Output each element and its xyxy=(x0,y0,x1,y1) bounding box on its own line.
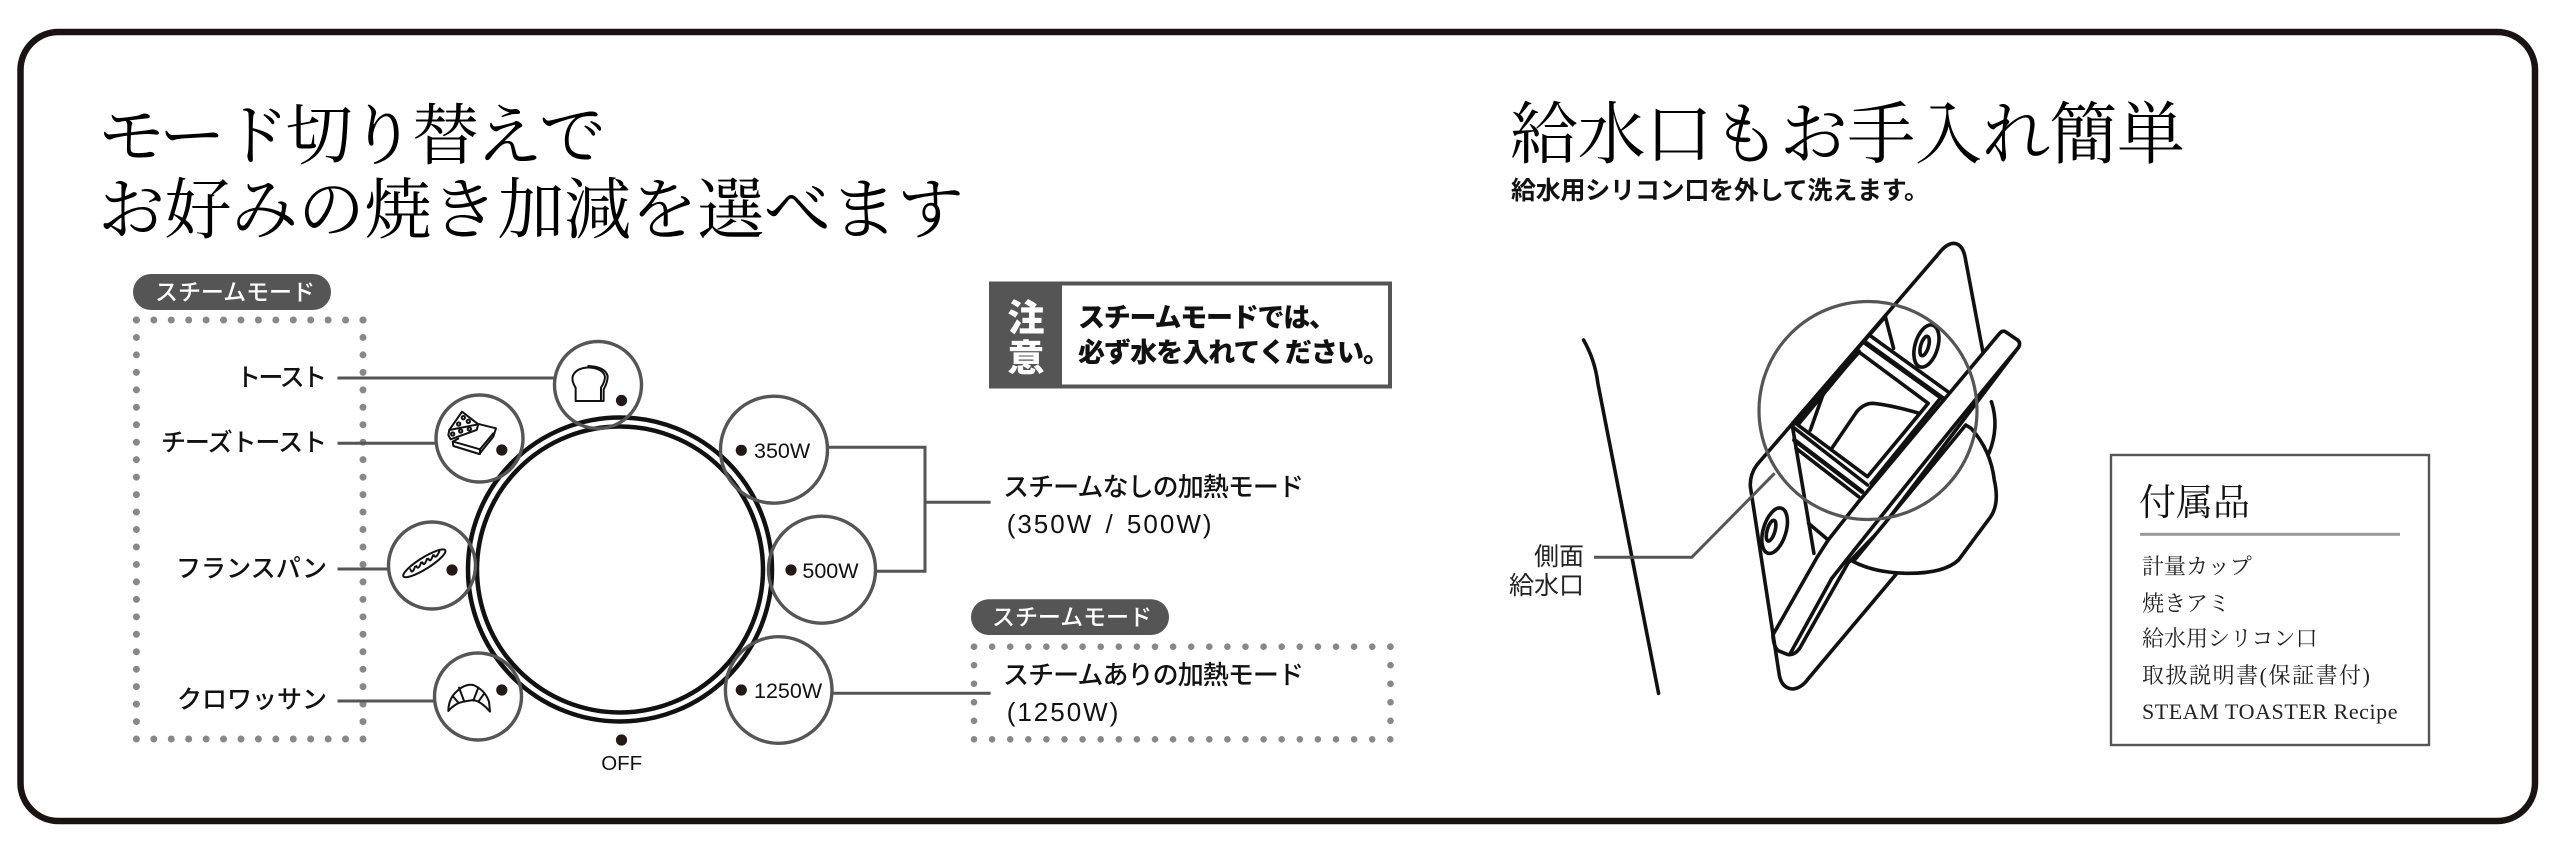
toaster side curve xyxy=(1584,340,1659,693)
water inlet drawing xyxy=(1750,243,2020,689)
caution box xyxy=(989,282,1390,388)
label: no-steam heating mode xyxy=(1003,467,1304,539)
label: no-steam heating mode: スチームなしの加熱モード xyxy=(1003,467,1304,504)
label: steam heating mode: (1250W) xyxy=(1007,697,1120,727)
leader line: 1250W xyxy=(832,692,991,695)
mode circle: 500W xyxy=(768,516,876,623)
mode circle: 1250W: 1250W xyxy=(754,679,823,703)
off position: OFF xyxy=(601,752,642,775)
food mode labels: チーズトースト xyxy=(161,423,327,459)
food mode labels xyxy=(161,358,327,716)
left title: モード切り替えで xyxy=(98,100,606,174)
label: side water inlet: 側面 xyxy=(1534,537,1584,573)
leader line: side inlet xyxy=(1594,473,1775,557)
label: steam heating mode: スチームありの加熱モード xyxy=(1003,655,1304,692)
left title xyxy=(98,100,964,248)
bracket: no-steam modes xyxy=(828,447,991,571)
mode circle: croissant xyxy=(434,653,522,740)
magnifier circle xyxy=(1759,302,1977,520)
label: no-steam heating mode: (350W / 500W) xyxy=(1007,509,1214,539)
caution box: 必ず水を入れてください。 xyxy=(1078,331,1390,370)
right subtitle: 給水用シリコン口を外して洗えます。 xyxy=(1511,171,1929,207)
accessories list: 取扱説明書(保証書付) xyxy=(2142,663,2370,688)
off position xyxy=(601,734,642,775)
mode circle: 350W: 350W xyxy=(754,439,811,463)
mode circle: cheese toast xyxy=(436,395,523,482)
food mode labels: フランスパン xyxy=(176,549,327,585)
steam mode pill: left: スチームモード xyxy=(155,273,315,307)
left title: お好みの焼き加減を選べます xyxy=(98,174,964,248)
accessories heading: 付属品 xyxy=(2139,483,2250,524)
caution box: 注 xyxy=(1008,288,1044,342)
caution box: 意 xyxy=(1008,328,1044,382)
dial ring xyxy=(468,418,772,722)
mode circle: toast xyxy=(554,342,642,428)
dotted box: steam heating mode xyxy=(974,647,1390,739)
illustration: water inlet xyxy=(1584,243,2020,693)
food mode labels: トースト xyxy=(236,358,327,394)
caution box: スチームモードでは、 xyxy=(1078,296,1336,335)
dotted box: steam food modes xyxy=(136,320,363,739)
accessories rule xyxy=(2140,533,2400,536)
accessories list xyxy=(2142,554,2398,724)
label: side water inlet: 給水口 xyxy=(1509,566,1584,602)
mode circle: baguette xyxy=(388,522,476,609)
label: side water inlet xyxy=(1509,537,1584,602)
steam mode pill: right: スチームモード xyxy=(992,598,1152,632)
accessories panel xyxy=(2111,455,2429,745)
label: steam heating mode xyxy=(1003,655,1304,727)
leader lines: food modes xyxy=(338,378,555,701)
accessories list: 焼きアミ xyxy=(2142,591,2230,616)
right title: 給水口もお手入れ簡単 xyxy=(1510,97,2185,173)
accessories list: 計量カップ xyxy=(2142,554,2252,579)
mode circle: 350W xyxy=(720,396,828,503)
mode circle: 500W: 500W xyxy=(802,559,859,583)
food mode labels: クロワッサン xyxy=(177,680,327,716)
mode circle: 1250W xyxy=(725,637,832,743)
accessories list: 給水用シリコン口 xyxy=(2142,626,2318,651)
accessories list: STEAM TOASTER Recipe xyxy=(2142,699,2398,724)
